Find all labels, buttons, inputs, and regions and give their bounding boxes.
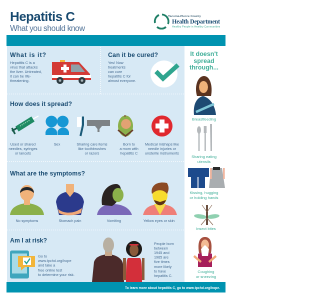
heading: am i at risk: Am I at risk?	[10, 238, 47, 245]
icon: older man	[92, 238, 124, 282]
text: people born: five times	[154, 260, 170, 264]
icon: medical cross	[152, 116, 172, 136]
text: no symptoms: No symptoms	[16, 219, 38, 223]
panel: symptoms	[10, 170, 177, 223]
text: kissing: or holding hands	[190, 195, 218, 200]
text: insect bites: Insect bites	[196, 226, 216, 231]
panel: how does it spread	[9, 101, 179, 155]
text: medical mishaps label: Medical mishaps like	[145, 142, 179, 146]
panel: what is it	[10, 52, 91, 84]
text: can it be cured: Yes! Now	[108, 61, 124, 65]
title: Hepatitis C	[10, 9, 76, 24]
logo: health department: Healthy People in Healthy Communities	[172, 24, 221, 28]
text: go to website: and take a	[38, 264, 56, 268]
text: what is it: the liver. Untreated,	[10, 70, 42, 74]
heading: what is it: What is it?	[10, 52, 46, 59]
text: sharing utensils	[191, 154, 217, 164]
title	[10, 9, 85, 33]
icon: stomach pain person	[56, 184, 84, 215]
icon: couple holding hands	[188, 167, 225, 188]
text: born label: Born to	[123, 142, 135, 146]
text: care items label: Sharing care items	[77, 142, 108, 146]
text: sex label: Sex	[54, 142, 60, 146]
icon: utensils	[197, 124, 212, 151]
text: people born: more likely	[154, 265, 172, 269]
text: born label: a mom with	[120, 147, 138, 151]
text: what is it: Hepatitis C is a	[10, 61, 36, 65]
text: needles label: Used or shared	[10, 142, 36, 146]
icon: woman in red dress	[123, 241, 144, 282]
text: sharing utensils: Sharing eating	[191, 154, 217, 159]
text: coughing: or sneezing	[196, 274, 216, 279]
icon: tablet with speech bubble	[10, 250, 35, 278]
text: medical mishaps label: needle injuries or	[148, 147, 177, 151]
text: people born: People born	[154, 242, 174, 246]
text: go to website	[38, 254, 74, 277]
logo: health department: Health Department	[172, 20, 220, 26]
title: What you should know	[10, 24, 85, 33]
icon: yellow eyes person	[143, 182, 177, 215]
icon: insect	[194, 205, 220, 225]
icon: ambulance	[52, 60, 91, 84]
text: needles label	[9, 142, 38, 155]
text: go to website: www.tpchd.org/hope	[38, 259, 71, 263]
text: what is it: it can be life-	[10, 74, 32, 78]
text: kissing: Kissing, hugging	[190, 190, 218, 195]
text: what is it	[10, 61, 42, 83]
text: needles label: or lancets	[15, 151, 31, 155]
text: what is it: virus that attacks	[10, 65, 38, 69]
text: people born: between	[154, 247, 168, 251]
heading: how does it spread: How does it spread?	[10, 101, 72, 108]
text: coughing: Coughing	[198, 269, 214, 274]
text: people born: to have	[154, 269, 166, 273]
logo: health department	[155, 14, 221, 29]
text: born label: hepatitis C	[120, 151, 138, 155]
text: people born: 1945 and	[154, 251, 169, 255]
text: care items label: like toothbrushes	[78, 147, 106, 151]
text: go to website: Go to	[38, 254, 47, 258]
icon: no symptoms person	[10, 185, 44, 215]
panel: am i at risk	[10, 238, 174, 282]
text: can it be cured: almost everyone.	[108, 79, 136, 83]
text: medical mishaps label	[145, 142, 179, 155]
heading: it doesn't spread through: It doesn't	[190, 51, 219, 58]
text: go to website: free online test	[38, 268, 62, 272]
text: can it be cured: hepatitis C for	[108, 74, 132, 78]
text: care items label	[77, 142, 108, 155]
text: what is it: threatening.	[10, 79, 29, 83]
text: care items label: or razors	[85, 151, 99, 155]
icon: vomiting person	[97, 184, 132, 215]
logo: health department: Tacoma-Pierce County	[168, 14, 201, 18]
text: people born: 1965 are	[154, 256, 169, 260]
bottom bar	[6, 282, 226, 292]
text: can it be cured: treatments	[108, 65, 126, 69]
top bar	[6, 35, 226, 46]
text: sharing utensils: utensils	[197, 159, 211, 164]
text: go to website: to determine your risk.	[38, 273, 74, 277]
icon: check mark	[150, 60, 178, 88]
heading: symptoms: What are the symptoms?	[10, 170, 85, 178]
bottom bar: To learn more about hepatitis C, go to www.tpchd.org/hope.	[125, 286, 220, 290]
heading: it doesn't spread through: spread	[194, 58, 214, 65]
icon: toothbrush and razor	[77, 116, 110, 136]
icon: coughing person	[194, 237, 216, 267]
text: people born	[154, 242, 174, 278]
main light blue panel	[7, 46, 184, 282]
text: needles label: needles, syringes	[9, 147, 38, 151]
icon: baby	[118, 115, 133, 136]
text: can it be cured: can cure	[108, 70, 122, 74]
heading: can it be cured: Can it be cured?	[108, 52, 158, 59]
heading: it doesn't spread through	[189, 51, 219, 72]
text: breastfeeding: Breastfeeding	[192, 116, 216, 122]
panel: can it be cured	[108, 52, 178, 88]
text: yellow eyes: Yellow eyes or skin	[143, 219, 175, 223]
panel: it doesn't spread through	[188, 51, 225, 279]
text: can it be cured	[108, 61, 136, 83]
text: coughing	[196, 269, 216, 279]
text: born label	[120, 142, 138, 155]
icon: two people	[46, 116, 69, 135]
heading: it doesn't spread through: through...	[189, 64, 219, 72]
icon: syringe	[12, 116, 38, 134]
text: vomiting: Vomiting	[107, 219, 121, 223]
text: people born: hepatitis C.	[154, 274, 172, 278]
icon: breastfeeding woman	[194, 76, 216, 115]
text: kissing	[190, 190, 218, 200]
text: stomach pain: Stomach pain	[59, 219, 81, 223]
text: medical mishaps label: unsterile instruments	[145, 151, 179, 155]
